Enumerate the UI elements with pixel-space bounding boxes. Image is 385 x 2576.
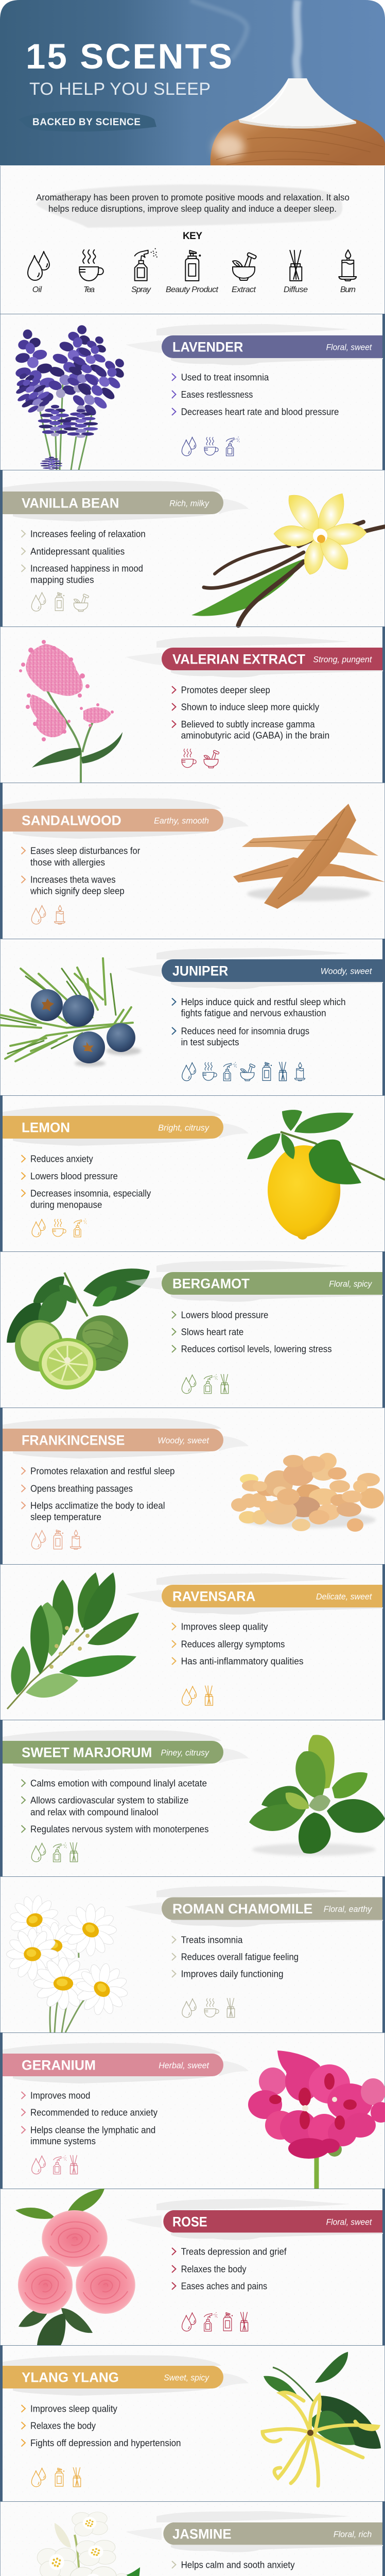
diffuser [211, 78, 385, 166]
image: rose [15, 2189, 135, 2345]
intro text [36, 192, 349, 214]
bullets: ylang ylang [22, 2404, 181, 2448]
bullets: roman chamomile: Improves daily functioning [181, 1969, 284, 1979]
heading: jasmine: Floral, rich [334, 2530, 372, 2539]
bullets: vanilla bean [22, 529, 146, 585]
bullets: roman chamomile [172, 1935, 299, 1979]
icons: bergamot [182, 1375, 229, 1394]
bullets: sandalwood: those with allergies [30, 857, 105, 868]
heading: ylang ylang: YLANG YLANG [22, 2370, 119, 2385]
bullets: juniper: Helps induce quick and restful sleep which [181, 997, 346, 1007]
heading: lavender: LAVENDER [172, 339, 243, 354]
icons: vanilla bean [31, 592, 89, 612]
heading: frankincense: FRANKINCENSE [22, 1432, 125, 1448]
bullets: rose [172, 2246, 287, 2292]
icons: valerian extract [182, 749, 219, 768]
key: spray: Spray [131, 285, 151, 294]
key: oil [28, 251, 49, 294]
bullets: roman chamomile: Reduces overall fatigue feeling [181, 1952, 299, 1962]
icons: ylang ylang [31, 2468, 81, 2487]
bullets: sweet marjorum [22, 1778, 208, 1834]
bullets: frankincense [22, 1466, 175, 1522]
image: vanilla [191, 494, 385, 625]
heading: vanilla bean [3, 481, 249, 521]
icons: lavender [182, 437, 240, 456]
bullets: bergamot: Reduces cortisol levels, lowering stress [181, 1344, 332, 1354]
bullets: valerian extract: Shown to induce sleep more quickly [181, 702, 319, 712]
heading: frankincense: Woody, sweet [157, 1435, 209, 1446]
heading: sweet marjorum [3, 1730, 249, 1771]
image: geranium [248, 2050, 385, 2189]
bullets: lavender: Used to treat insomnia [181, 372, 269, 382]
key: extract [232, 253, 256, 294]
bullets: valerian extract: Believed to subtly increase gamma [181, 719, 316, 730]
bullets: geranium [22, 2091, 157, 2146]
panel: jasmine [0, 2501, 385, 2576]
bullets: sweet marjorum: Allows cardiovascular system to stabilize [30, 1795, 188, 1805]
title: 15 SCENTS [26, 37, 232, 76]
heading: ravensara: RAVENSARA [172, 1589, 255, 1604]
bullets: bergamot: Lowers blood pressure [181, 1310, 268, 1320]
heading: geranium [3, 2043, 249, 2083]
heading: ravensara [126, 1573, 383, 1615]
key: tea [79, 250, 103, 294]
bullets: bergamot: Slows heart rate [181, 1327, 243, 1337]
heading: bergamot: BERGAMOT [172, 1276, 250, 1291]
bullets: vanilla bean: Antidepressant qualities [30, 546, 125, 556]
heading: valerian extract: Strong, pungent [313, 654, 373, 665]
panel: ylang ylang [0, 2345, 385, 2501]
bullets: sweet marjorum: and relax with compound linalool [30, 1807, 159, 1818]
key: extract: Extract [232, 285, 256, 294]
bullets: ravensara: Reduces allergy symptoms [181, 1639, 285, 1650]
bullets: geranium: Improves mood [30, 2091, 90, 2101]
key: beauty product: Beauty Product [166, 285, 219, 294]
bullets: valerian extract [172, 685, 329, 741]
key: burn [339, 250, 356, 294]
heading: roman chamomile [126, 1886, 383, 1927]
intro text: Aromatherapy has been proven to promote positive moods and relaxation. It also [36, 192, 349, 202]
bullets: lemon: Decreases insomnia, especially [30, 1188, 151, 1198]
header banner [0, 0, 385, 166]
panel: vanilla bean [0, 470, 385, 626]
heading: valerian extract: VALERIAN EXTRACT [172, 651, 305, 667]
bullets: jasmine: Helps calm and sooth anxiety [181, 2560, 295, 2570]
bullets: frankincense: Opens breathing passages [30, 1484, 133, 1494]
panel: lavender [0, 314, 385, 470]
key: tea: Tea [83, 285, 95, 294]
heading: lemon: LEMON [22, 1120, 70, 1136]
heading: lavender: Floral, sweet [326, 342, 372, 352]
bullets: lemon: during menopause [30, 1199, 102, 1210]
bullets: valerian extract: aminobutyric acid (GABA) in the brain [181, 731, 329, 741]
bullets: geranium: immune systems [30, 2136, 96, 2146]
bullets: juniper: fights fatigue and nervous exhaustion [181, 1008, 326, 1018]
image: bergamot [7, 1268, 150, 1389]
bullets: lemon [22, 1154, 151, 1210]
panel: valerian extract [0, 626, 385, 783]
image: juniper [0, 958, 141, 1066]
icons: frankincense [31, 1530, 81, 1549]
bullets: ravensara [172, 1622, 304, 1666]
key: spray [131, 248, 157, 294]
icons: lemon [32, 1219, 86, 1237]
image: ylang ylang [262, 2352, 381, 2486]
image: jasmine [10, 2512, 140, 2576]
heading: sweet marjorum: SWEET MARJORUM [22, 1744, 152, 1760]
heading: roman chamomile: Floral, earthy [324, 1904, 373, 1914]
bullets: geranium: Helps cleanse the lymphatic and [30, 2125, 155, 2135]
heading: bergamot [126, 1261, 383, 1302]
heading: sandalwood [3, 798, 249, 839]
heading: juniper [126, 948, 383, 989]
icons: roman chamomile [182, 1998, 235, 2018]
heading: juniper: JUNIPER [172, 963, 228, 979]
heading: vanilla bean: VANILLA BEAN [22, 496, 119, 511]
bullets: lavender: Decreases heart rate and blood pressure [181, 406, 339, 417]
icons: sandalwood [31, 905, 65, 924]
panel: geranium [0, 2032, 385, 2189]
panel: roman chamomile [0, 1876, 385, 2032]
bullets: bergamot [172, 1310, 332, 1354]
panel: ravensara [0, 1564, 385, 1720]
heading: sandalwood: Earthy, smooth [154, 816, 209, 825]
image: valerian [19, 640, 122, 783]
heading: frankincense [3, 1418, 249, 1459]
bullets: ylang ylang: Fights off depression and hypertension [30, 2438, 181, 2448]
heading: lavender [126, 324, 383, 365]
heading: jasmine: JASMINE [172, 2527, 232, 2542]
bullets: sandalwood: which signify deep sleep [30, 886, 125, 896]
bullets: geranium: Recommended to reduce anxiety [30, 2107, 157, 2117]
heading: ylang ylang: Sweet, spicy [164, 2373, 209, 2382]
bullets: juniper: Reduces need for insomnia drugs [181, 1026, 309, 1037]
bullets: frankincense: sleep temperature [30, 1512, 101, 1522]
icons: ravensara [182, 1686, 213, 1705]
bullets: vanilla bean: mapping studies [30, 575, 94, 585]
intro panel [36, 184, 349, 228]
heading: rose: Floral, sweet [326, 2217, 372, 2227]
image: lavender [8, 319, 136, 470]
heading: lemon [3, 1105, 249, 1146]
heading: vanilla bean: Rich, milky [169, 499, 209, 508]
bullets: sandalwood [22, 846, 140, 896]
key: oil: Oil [32, 285, 42, 294]
heading: juniper: Woody, sweet [321, 967, 372, 976]
bullets: ylang ylang: Relaxes the body [30, 2420, 96, 2431]
image: chamomile [3, 1888, 138, 2032]
bullets: rose: Eases aches and pains [181, 2281, 267, 2292]
bullets: vanilla bean: Increased happiness in mood [30, 564, 143, 574]
heading: rose [126, 2199, 383, 2240]
image: lemon [247, 1110, 385, 1240]
steam [190, 0, 298, 80]
image: sandalwood [233, 804, 385, 909]
key: diffuse [284, 250, 308, 294]
key [28, 231, 356, 294]
bullets: vanilla bean: Increases feeling of relaxation [30, 529, 146, 539]
bullets: rose: Treats depression and grief [181, 2246, 287, 2257]
panel: juniper [0, 939, 385, 1095]
icons: juniper [182, 1062, 305, 1081]
key: beauty product [166, 250, 219, 294]
image: frankincense [231, 1453, 384, 1532]
bullets: frankincense: Promotes relaxation and restful sleep [30, 1466, 175, 1477]
heading: bergamot: Floral, spicy [329, 1279, 373, 1289]
bullets: ravensara: Has anti-inflammatory qualities [181, 1656, 304, 1666]
intro text: helps reduce disruptions, improve sleep quality and induce a deeper sleep. [48, 204, 337, 214]
panel: rose [0, 2189, 385, 2345]
bullets: sandalwood: Increases theta waves [30, 875, 116, 885]
heading: ravensara: Delicate, sweet [316, 1592, 372, 1601]
key: KEY [183, 231, 202, 242]
icons: sweet marjorum [31, 1843, 78, 1862]
panel: sweet marjorum [0, 1720, 385, 1876]
key: burn: Burn [340, 285, 356, 294]
icons: geranium [32, 2156, 78, 2174]
bullets: rose: Relaxes the body [181, 2264, 247, 2274]
bullets: juniper: in test subjects [181, 1037, 239, 1047]
heading: valerian extract [126, 636, 383, 677]
heading: roman chamomile: ROMAN CHAMOMILE [172, 1901, 312, 1917]
panel: frankincense [0, 1408, 385, 1564]
subtitle: TO HELP YOU SLEEP [29, 79, 211, 99]
bullets: ravensara: Improves sleep quality [181, 1622, 268, 1632]
bullets: sandalwood: Eases sleep disturbances for [30, 846, 140, 856]
heading: sandalwood: SANDALWOOD [22, 813, 121, 828]
bullets: juniper [172, 997, 346, 1047]
heading: geranium: Herbal, sweet [159, 2061, 209, 2070]
panel: sandalwood [0, 783, 385, 939]
bullets: valerian extract: Promotes deeper sleep [181, 685, 270, 696]
bullets: sweet marjorum: Regulates nervous system with monoterpenes [30, 1824, 208, 1834]
bullets: jasmine [172, 2560, 323, 2576]
heading: lemon: Bright, citrusy [158, 1123, 210, 1132]
key: diffuse: Diffuse [284, 285, 308, 294]
bullets: lavender [172, 372, 339, 417]
heading: ylang ylang [3, 2355, 249, 2396]
panel: bergamot [0, 1251, 385, 1408]
image: ravensara [7, 1572, 139, 1709]
bullets: ylang ylang: Improves sleep quality [30, 2404, 117, 2414]
tag: backed by science: BACKED BY SCIENCE [32, 117, 141, 128]
panel: lemon [0, 1095, 385, 1251]
bullets: lemon: Lowers blood pressure [30, 1171, 118, 1181]
bullets: lavender: Eases restlessness [181, 389, 253, 400]
image: marjorum [249, 1735, 385, 1856]
icons: rose [182, 2312, 248, 2331]
tag: backed by science [33, 111, 156, 131]
heading: jasmine [126, 2511, 383, 2552]
heading: geranium: GERANIUM [22, 2058, 96, 2073]
bullets: roman chamomile: Treats insomnia [181, 1935, 243, 1945]
bullets: frankincense: Helps acclimatize the body to ideal [30, 1500, 165, 1511]
heading: sweet marjorum: Piney, citrusy [161, 1748, 209, 1758]
bullets: sweet marjorum: Calms emotion with compound linalyl acetate [30, 1778, 207, 1789]
bullets: lemon: Reduces anxiety [30, 1154, 93, 1164]
heading: rose: ROSE [172, 2214, 207, 2230]
